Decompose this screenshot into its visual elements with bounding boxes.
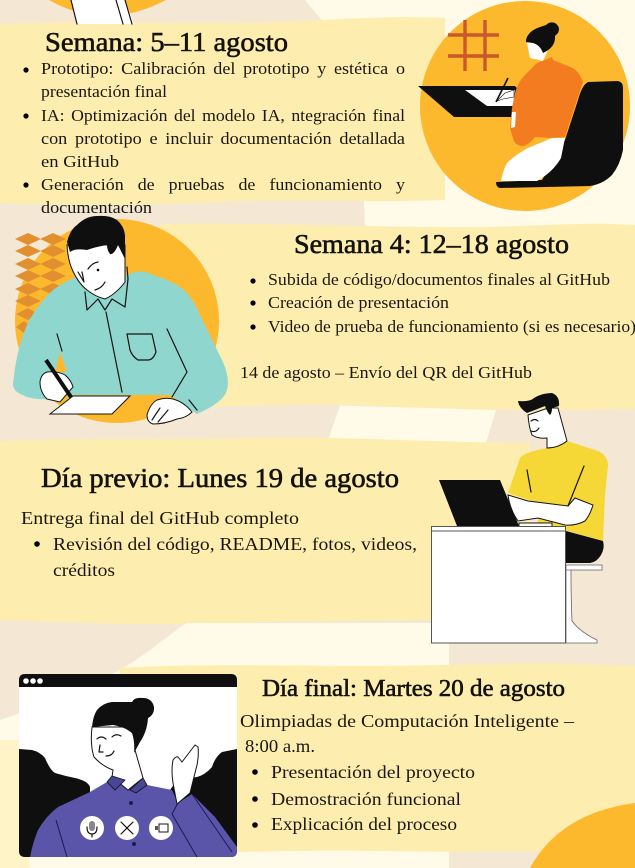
text: final day details: Explicación del proceso — [271, 814, 457, 834]
list: week tasks: en GitHub — [41, 152, 119, 171]
heading: Semana 4: Semana 4: 12–18 agosto — [294, 229, 569, 259]
list: week 4 tasks: Video de prueba de funcionamiento (si es necesario) — [268, 317, 635, 336]
list: week tasks — [23, 59, 406, 217]
text: final day details: Presentación del proyecto — [271, 762, 475, 782]
list: week tasks: documentación — [41, 198, 153, 217]
heading: Día previo: Día previo: Lunes 19 de agosto — [41, 463, 399, 493]
heading: Día final: Día final: Martes 20 de agosto — [262, 676, 565, 702]
text: final day details: 8:00 a.m. — [245, 736, 315, 756]
text: final delivery: Revisión del código, README, fotos, videos, — [53, 534, 417, 554]
illustration: man in yellow shirt at laptop — [432, 393, 608, 643]
heading: Semana 5-11 agosto: Semana: 5–11 agosto — [45, 27, 288, 57]
list: week tasks: con prototipo e incluir documentación detallada — [41, 129, 405, 148]
list: week 4 tasks — [250, 270, 635, 336]
list: week 4 tasks: Creación de presentación — [268, 293, 450, 312]
list: week tasks: Prototipo: Calibración del prototipo y estética o — [41, 59, 405, 78]
white desk — [432, 526, 566, 643]
list: week 4 tasks: Subida de código/documentos finales al GitHub — [268, 270, 610, 289]
text: final delivery — [21, 508, 417, 580]
text: final day details — [240, 711, 575, 834]
illustration: woman drawing at desk — [418, 1, 630, 211]
icon: microphone button — [80, 816, 104, 840]
decorative circle: bottom right — [530, 803, 635, 868]
illustration: video call window — [19, 674, 237, 857]
illustration: top cropped figure — [49, 0, 166, 24]
text: final delivery: créditos — [53, 560, 115, 580]
icon: close button — [115, 816, 139, 840]
text: QR date: 14 de agosto – Envío del QR del GitHub — [240, 363, 532, 382]
text: final delivery: Entrega final del GitHub completo — [21, 508, 299, 528]
icon: camera button — [149, 816, 173, 840]
icon: grid mark — [448, 20, 499, 71]
text: final day details: Demostración funcional — [271, 789, 461, 809]
text: final day details: Olimpiadas de Computación Inteligente – — [240, 711, 575, 731]
list: week tasks: IA: Optimización del modelo IA, ntegración final — [41, 106, 405, 125]
illustration: man writing in teal shirt — [13, 216, 228, 424]
list: week tasks: presentación final — [41, 82, 167, 101]
diamond pattern — [15, 233, 66, 333]
list: week tasks: Generación de pruebas de funcionamiento y — [41, 175, 406, 194]
